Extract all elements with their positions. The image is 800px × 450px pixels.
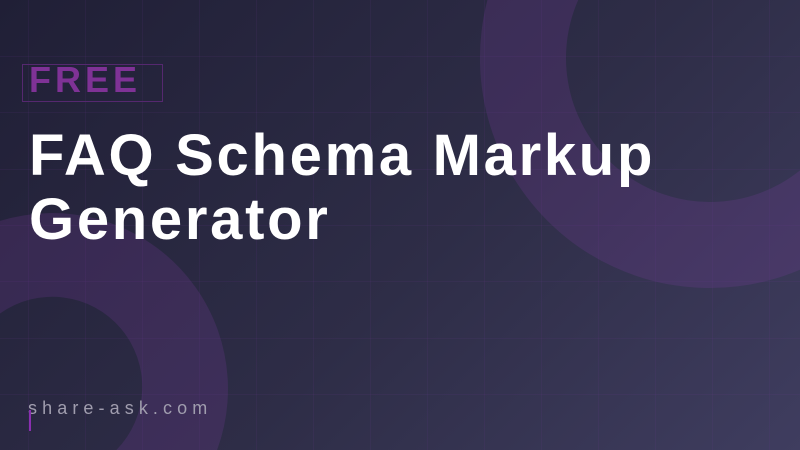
- title: Generator: [29, 187, 330, 252]
- title: [29, 123, 655, 252]
- website label: share-ask.com: [28, 398, 212, 418]
- decorative ring: top right: [480, 0, 800, 288]
- decorative ring: bottom left: [0, 213, 228, 450]
- badge: FREE: [22, 64, 163, 102]
- badge: FREE: FREE: [29, 58, 141, 100]
- accent bar: [29, 410, 31, 431]
- title: FAQ Schema Markup: [29, 123, 655, 188]
